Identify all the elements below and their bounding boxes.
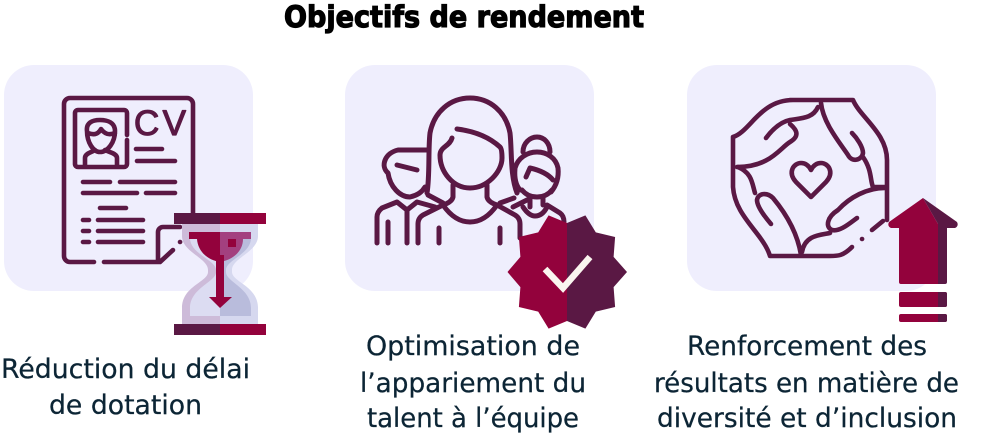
label: staffing time: de dotation [49,390,202,421]
icon: CV document [64,98,193,262]
label: staffing time: Réduction du délai [1,354,250,385]
title: Objectifs de rendement [284,0,644,34]
panel background [4,65,253,291]
label: diversity and inclusion: résultats en matière de [654,368,959,399]
panel: talent matching [345,65,627,329]
icon: hands around heart [733,100,887,256]
label: talent matching: Optimisation de [366,331,580,362]
label: talent matching [360,331,586,434]
panel background [345,65,594,291]
icon: up arrow [888,198,958,322]
panel: staffing time [4,65,266,335]
label: diversity and inclusion: diversité et d’inclusion [657,403,957,434]
label: talent matching: l’appariement du [360,368,586,399]
icon: CV document: CV [134,104,187,143]
icon: hourglass [174,213,266,335]
panel background [687,65,936,291]
panel: diversity and inclusion [687,65,958,322]
icon: check badge [508,215,627,329]
icon: three people [377,98,564,243]
label: diversity and inclusion: Renforcement des [687,331,927,362]
label: talent matching: talent à l’équipe [367,403,579,434]
label: diversity and inclusion [654,331,959,434]
label: staffing time [1,354,250,421]
